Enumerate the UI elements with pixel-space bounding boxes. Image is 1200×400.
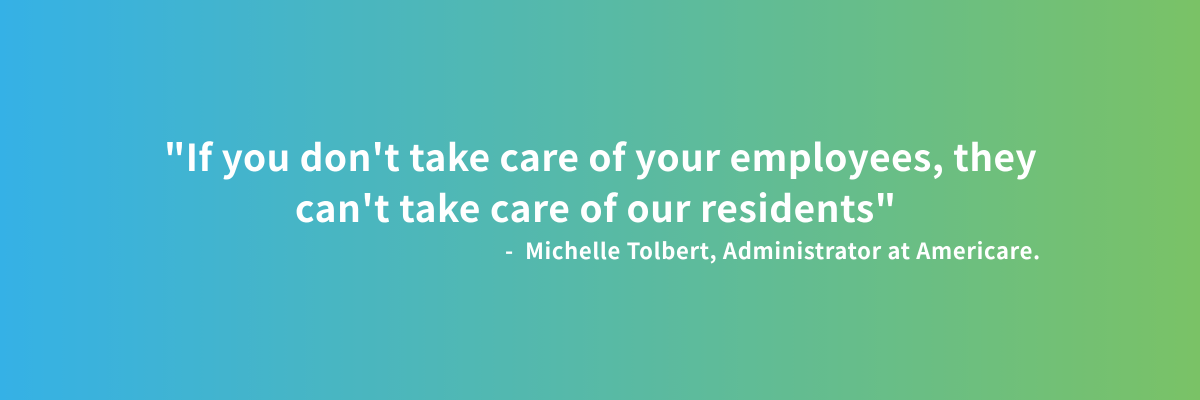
quote line 1: "If you don't take care of your employees, they	[164, 128, 1037, 182]
quote line 2: can't take care of our residents"	[295, 179, 897, 233]
attribution: - Michelle Tolbert, Administrator at Americare.	[505, 234, 1041, 266]
